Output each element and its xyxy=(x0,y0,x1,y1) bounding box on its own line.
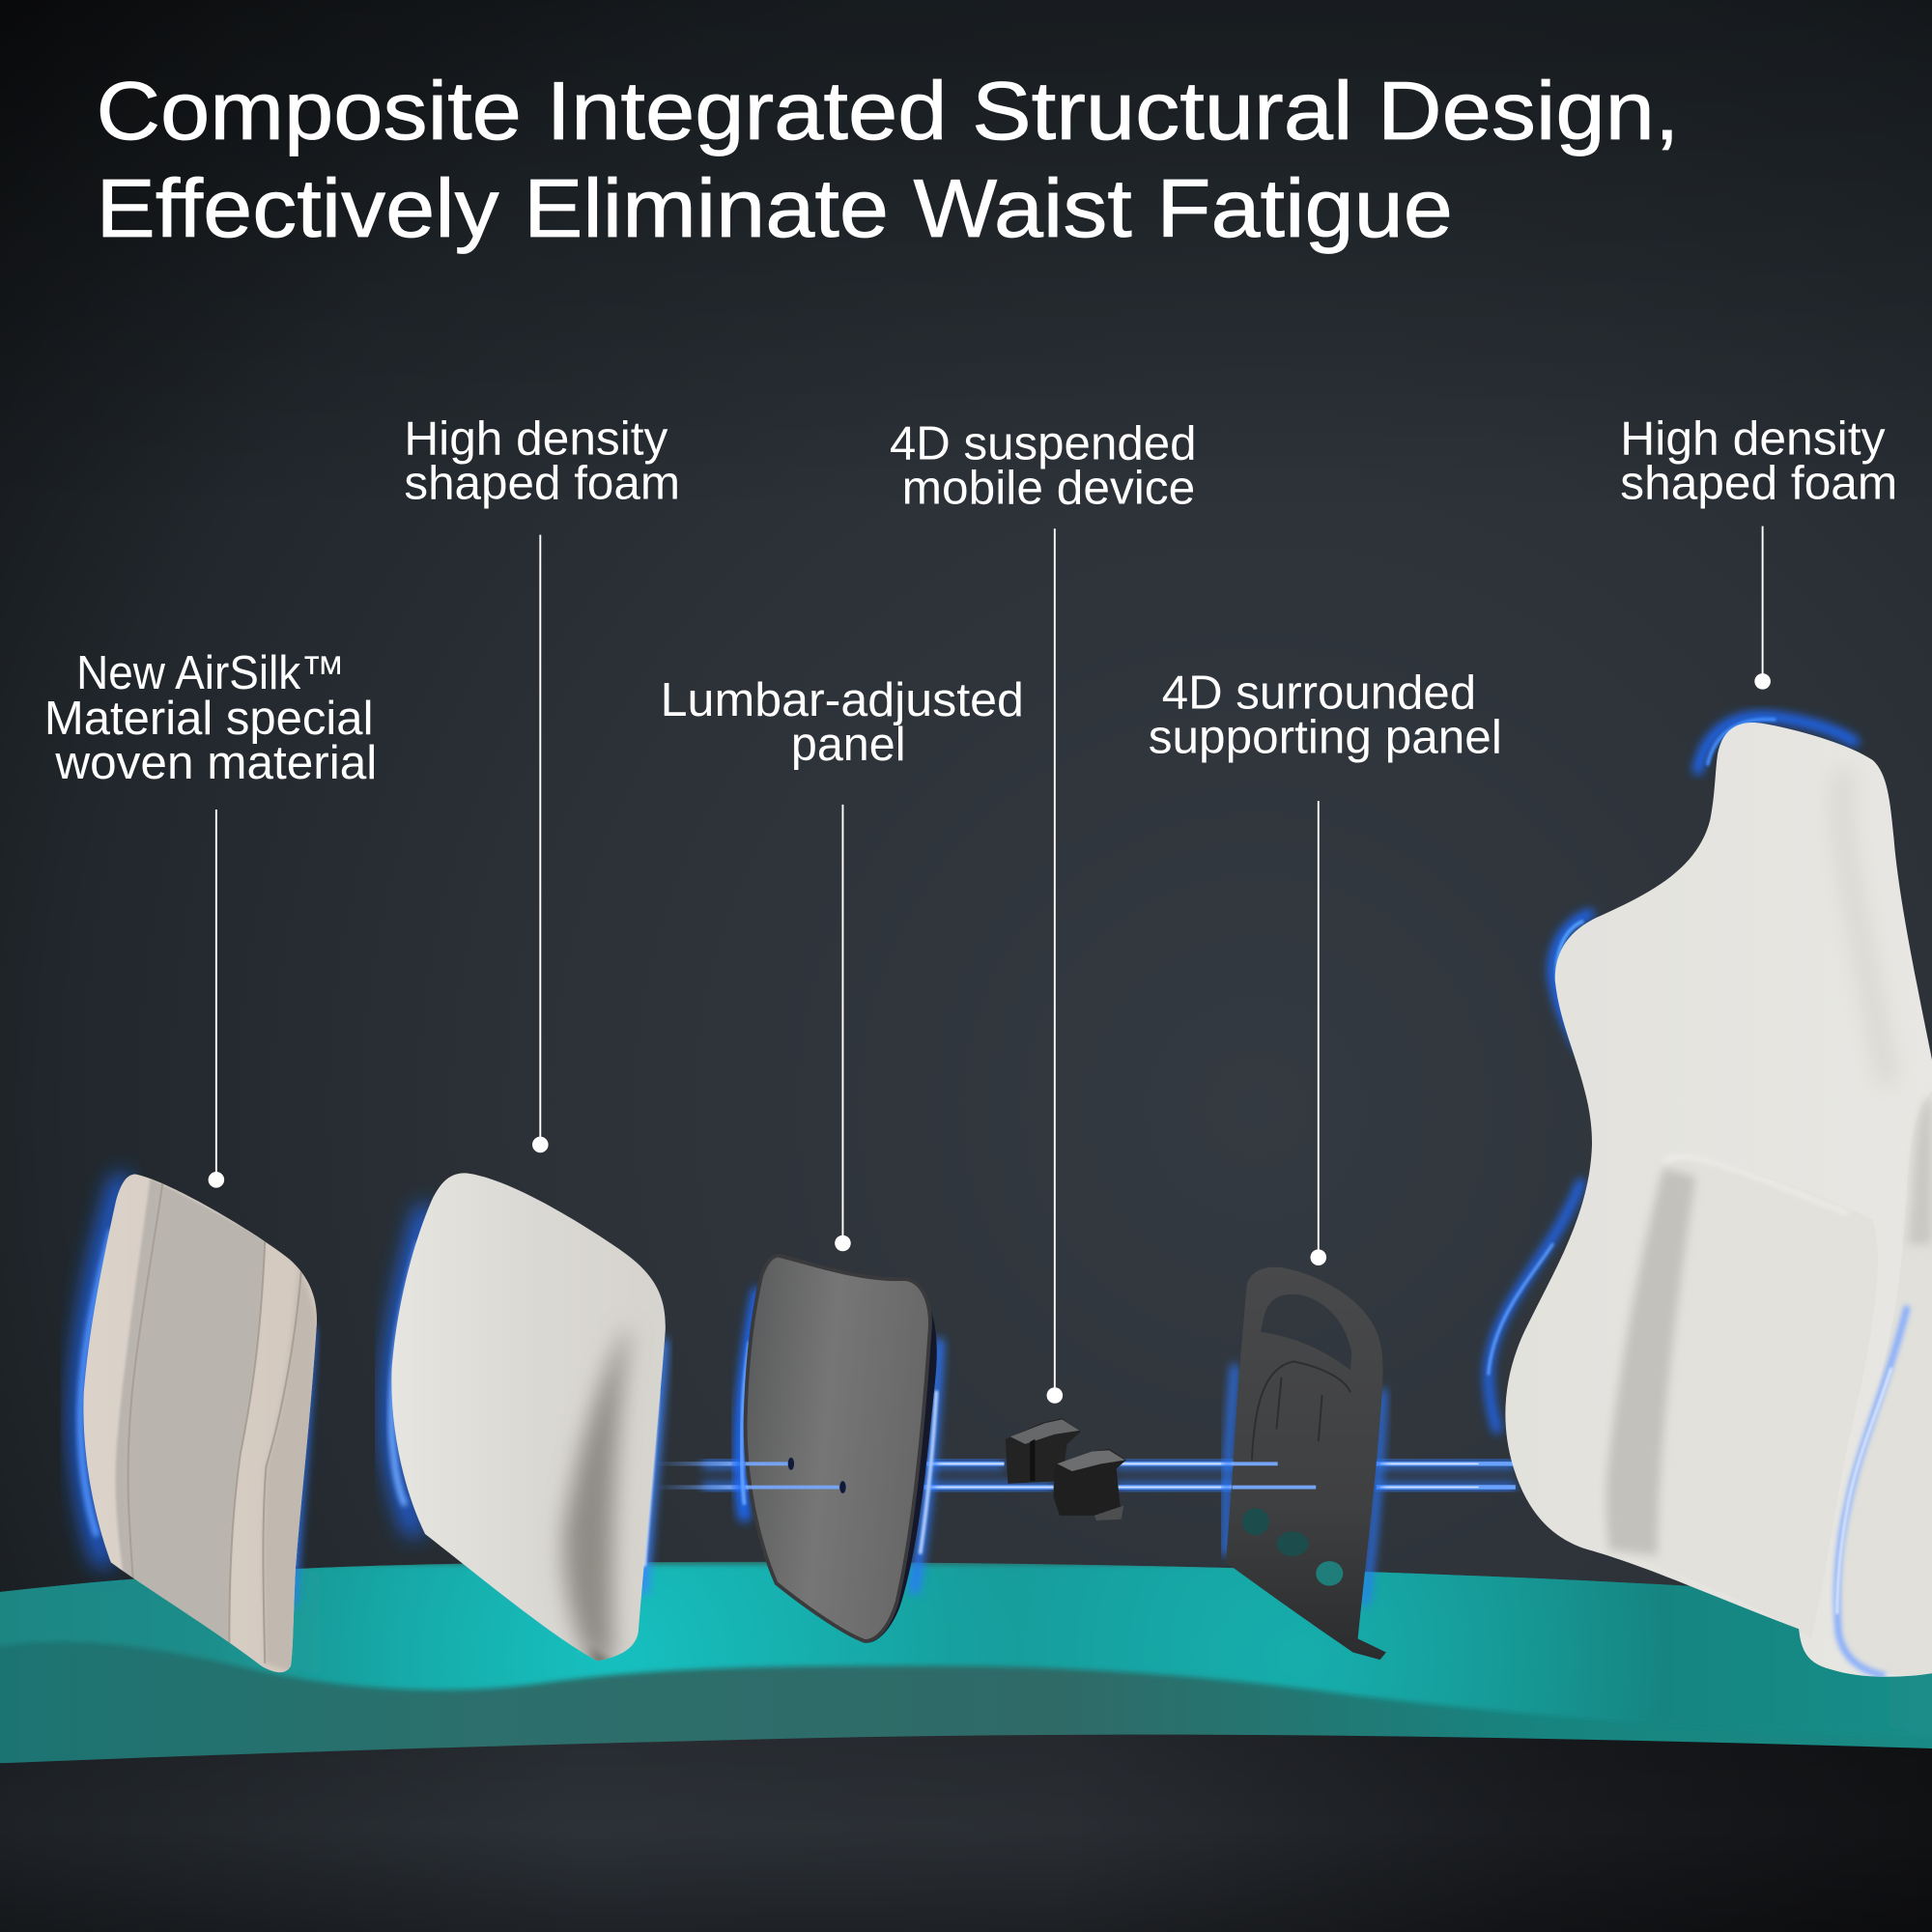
teal floor band xyxy=(0,1552,1932,1768)
blue glow: lumbar panel xyxy=(740,1293,939,1589)
support plate inner relief xyxy=(1252,1361,1350,1460)
title: Effectively Eliminate Waist Fatigue xyxy=(96,163,1453,255)
label: AirSilk material: New AirSilk™ xyxy=(76,647,345,699)
label: 4D suspended mobile device xyxy=(890,418,1197,515)
label: high density foam left: High density xyxy=(404,413,668,466)
leader line: lumbar-adjusted panel xyxy=(835,805,851,1251)
connecting light beams xyxy=(653,1463,1516,1488)
panel face xyxy=(746,1256,930,1641)
beams on panel xyxy=(746,1463,839,1488)
label: high density foam right xyxy=(1620,413,1897,510)
support plate lower ovals xyxy=(1242,1508,1343,1586)
title xyxy=(96,66,1680,255)
label: AirSilk material: Material special xyxy=(44,693,373,745)
label: lumbar-adjusted panel: panel xyxy=(791,719,905,771)
blue glow: chair xyxy=(1489,717,1855,1430)
panel dark back rim xyxy=(865,1293,937,1643)
label: AirSilk material: woven material xyxy=(54,737,377,789)
label: 4D surrounded supporting panel xyxy=(1149,667,1502,763)
label: 4D suspended mobile device: mobile device xyxy=(902,463,1195,515)
label: AirSilk material xyxy=(44,647,377,789)
label: 4D suspended mobile device: 4D suspended xyxy=(890,418,1197,470)
beams on support plate xyxy=(1233,1463,1316,1488)
cover right textured strip xyxy=(263,1264,318,1673)
label: 4D surrounded supporting panel: 4D surrounded xyxy=(1162,667,1476,719)
label: 4D surrounded supporting panel: supporting panel xyxy=(1149,711,1502,763)
leader line: 4D surrounded supporting panel xyxy=(1311,801,1326,1265)
part: lumbar-adjusted panel xyxy=(740,1256,939,1643)
blue glow: support panel xyxy=(1226,1368,1382,1602)
blue glow: foam pad xyxy=(391,1213,663,1589)
blue glow: cover xyxy=(80,1182,310,1602)
panel holes xyxy=(788,1458,846,1493)
label: high density foam right: shaped foam xyxy=(1620,458,1897,510)
cover central woven strip xyxy=(116,1178,265,1645)
part: 4D suspended mobile device xyxy=(1006,1418,1126,1520)
recess shaded wall xyxy=(1606,1168,1695,1555)
support plate body xyxy=(1226,1267,1386,1660)
foam pad body xyxy=(382,1164,671,1669)
label: high density foam left: shaped foam xyxy=(404,458,680,510)
cover body xyxy=(83,1175,317,1673)
part: AirSilk woven cover xyxy=(74,1164,327,1682)
recess of backrest xyxy=(1783,1623,1799,1632)
leader line: AirSilk material xyxy=(209,810,224,1188)
label: lumbar-adjusted panel: Lumbar-adjusted xyxy=(661,674,1024,726)
leader line: high density foam right xyxy=(1754,526,1771,690)
title: Composite Integrated Structural Design, xyxy=(96,66,1680,157)
wing blue highlight xyxy=(1837,1306,1907,1676)
part: high density foam chair back xyxy=(1489,708,1932,1694)
part: high density foam pad xyxy=(382,1164,671,1669)
part: 4D surrounded supporting panel xyxy=(1226,1267,1386,1660)
label: lumbar-adjusted panel xyxy=(661,674,1024,771)
chair body xyxy=(1491,708,1932,1694)
leader line: 4D suspended mobile device xyxy=(1047,528,1063,1404)
leader line: high density foam left xyxy=(532,535,549,1152)
right wing xyxy=(1909,1673,1932,1676)
bracket left xyxy=(1006,1418,1081,1484)
bracket right xyxy=(1054,1449,1126,1520)
label: high density foam left xyxy=(404,413,680,510)
label: high density foam right: High density xyxy=(1620,413,1886,466)
